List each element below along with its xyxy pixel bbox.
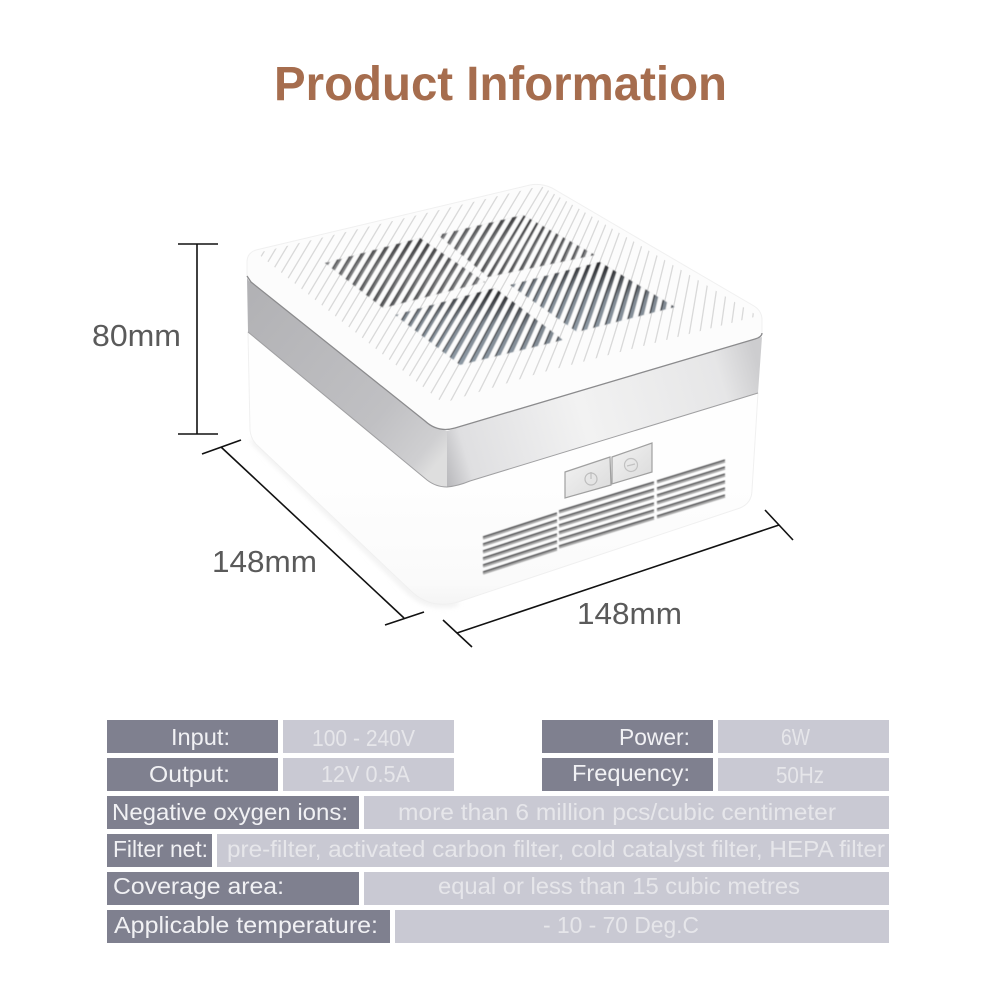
row: input: Input: [171, 724, 230, 750]
dimension: width [443, 510, 793, 647]
row: filter net: pre-filter, activated carbon filter, cold catalyst filter, HEPA filter [227, 836, 885, 862]
opening: bottom [395, 288, 563, 365]
row: filter net: Filter net: [113, 836, 208, 862]
row: coverage area: Coverage area: [113, 873, 284, 899]
row: input: 100 - 240V [312, 725, 416, 751]
row: input [107, 720, 454, 753]
row: frequency: Frequency: [572, 760, 690, 786]
icon: power [585, 472, 597, 485]
opening: top [438, 215, 595, 277]
opening: left [325, 238, 485, 308]
product illustration: air purifier [246, 184, 763, 608]
silver band [247, 277, 762, 487]
row: power: 6W [781, 724, 810, 750]
row: coverage area: equal or less than 15 cubic metres [438, 873, 800, 899]
row: output: Output: [149, 761, 230, 787]
row: negative oxygen ions [107, 796, 889, 829]
row: output [107, 758, 454, 791]
dimension: depth: 148mm [212, 544, 317, 579]
row: power [542, 720, 889, 753]
vents [483, 460, 725, 574]
row: coverage area [107, 872, 889, 905]
row: output: 12V 0.5A [321, 761, 411, 787]
row: applicable temperature: Applicable temperature: [114, 912, 378, 938]
base body [248, 332, 758, 604]
row: frequency: 50Hz [776, 762, 824, 788]
row: negative oxygen ions: more than 6 million pcs/cubic centimeter [398, 799, 836, 825]
lid top face [246, 184, 763, 430]
surface grooves [260, 186, 754, 401]
row: applicable temperature: - 10 - 70 Deg.C [543, 912, 699, 938]
specification table [107, 720, 889, 943]
row: applicable temperature [107, 910, 889, 943]
icon: mode [624, 458, 638, 472]
row: frequency [542, 758, 889, 791]
row: filter net [107, 834, 889, 867]
grille openings [324, 214, 675, 366]
dimension: height: 80mm [92, 318, 181, 353]
control buttons [565, 443, 652, 498]
opening: right [510, 262, 675, 332]
title: Product Information [274, 58, 727, 111]
row: power: Power: [619, 724, 690, 750]
row: negative oxygen ions: Negative oxygen ions: [112, 799, 348, 825]
dimension: depth [202, 440, 424, 625]
soft shadow [252, 440, 458, 605]
dimension: width: 148mm [577, 596, 682, 631]
